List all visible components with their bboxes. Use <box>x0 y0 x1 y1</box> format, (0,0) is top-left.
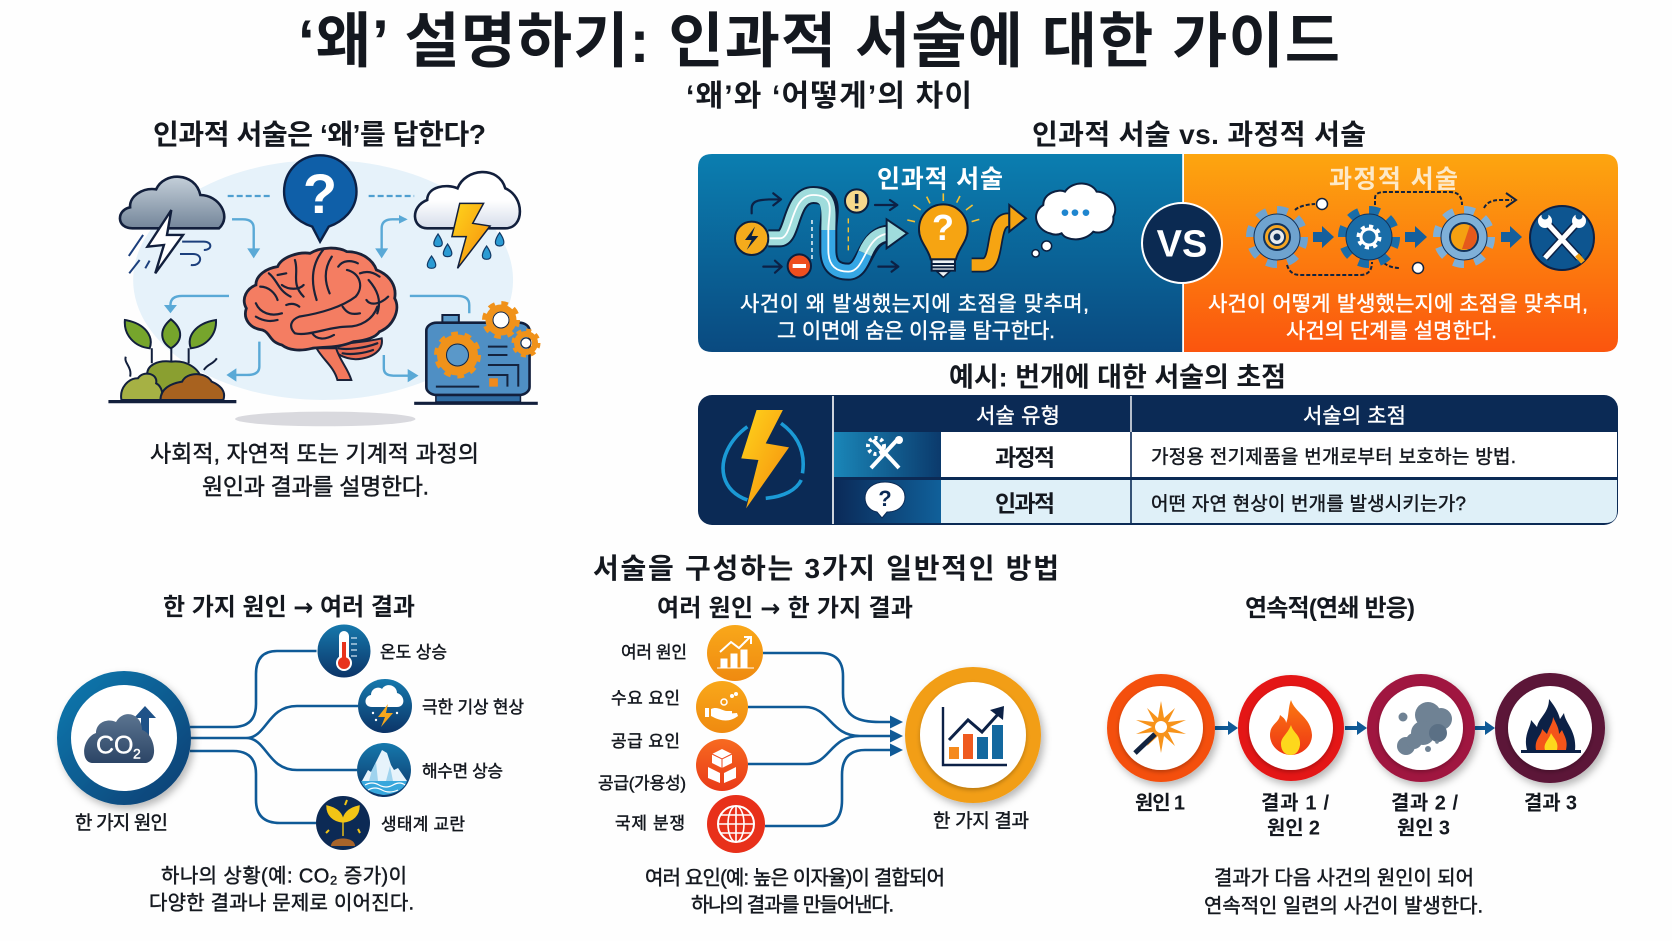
cause: supply availability <box>598 739 748 793</box>
heading: 연속적(연쇄 반응) <box>1245 595 1415 622</box>
icon: machine <box>414 315 538 403</box>
causal description <box>740 293 1089 343</box>
heading: 인과적 서술은 ‘왜’를 답한다? <box>153 119 486 150</box>
heading: lightning example: 예시: 번개에 대한 서술의 초점 <box>949 362 1286 392</box>
description: 결과가 다음 사건의 원인이 되어 <box>1214 866 1474 890</box>
step: effect 1 / cause 2 <box>1238 675 1344 840</box>
causal heading: 인과적 서술 <box>877 166 1003 194</box>
icons: process gears <box>1251 192 1594 275</box>
icon: thunder cloud <box>415 172 520 268</box>
description <box>645 866 945 916</box>
bulb question mark: ? <box>932 207 954 248</box>
arrows around brain <box>164 215 469 382</box>
process description: 사건의 단계를 설명한다. <box>1286 320 1497 343</box>
step: effect 2 / cause 3: 결과 2 / <box>1391 792 1458 814</box>
cause: demand factors <box>611 681 748 733</box>
icon: question head: ? <box>878 486 892 511</box>
effect: sea level rise: 해수면 상승 <box>422 762 503 781</box>
row: causal: 인과적 <box>995 490 1055 516</box>
panel: process narrative <box>1184 154 1618 352</box>
step: effect 1 / cause 2: 원인 2 <box>1267 816 1320 840</box>
description <box>150 440 479 500</box>
panel: causal narrative answers why <box>108 119 538 500</box>
gear 1 <box>1251 211 1303 263</box>
effect: temperature rise <box>317 624 447 678</box>
description <box>1204 866 1483 918</box>
panel: one cause many effects <box>57 594 524 914</box>
row: causal: 어떤 자연 현상이 번개를 발생시키는가? <box>1151 493 1466 515</box>
table header <box>976 405 1406 428</box>
connector lines <box>190 651 358 823</box>
step: effect 1 / cause 2: 결과 1 / <box>1261 792 1329 814</box>
description: 하나의 결과를 만들어낸다. <box>691 894 894 916</box>
panel: comparison <box>698 154 1618 352</box>
cause: demand factors: 수요 요인 <box>611 689 680 708</box>
effect: ecosystem disturbance <box>316 796 465 850</box>
step: effect 2 / cause 3: 원인 3 <box>1397 816 1450 840</box>
process description <box>1208 293 1588 343</box>
cause: international conflict <box>615 795 765 853</box>
description <box>149 864 414 914</box>
icon: fire <box>1521 699 1581 752</box>
table: lightning example <box>698 395 1618 525</box>
icon: question head <box>865 482 905 518</box>
icon: plants and soil <box>108 319 236 402</box>
description: 하나의 상황(예: CO₂ 증가)이 <box>161 864 407 888</box>
causal description: 그 이면에 숨은 이유를 탐구한다. <box>777 320 1055 343</box>
cause: multiple causes: 여러 원인 <box>621 643 687 662</box>
cause: multiple causes <box>621 625 763 681</box>
effect: extreme weather: 극한 기상 현상 <box>422 698 524 717</box>
icon: tools <box>1530 206 1594 270</box>
description: 사회적, 자연적 또는 기계적 과정의 <box>150 440 479 466</box>
effect: extreme weather <box>358 679 524 733</box>
step: effect 3: 결과 3 <box>1524 792 1577 814</box>
step: cause 1 <box>1107 674 1215 814</box>
row: process: 가정용 전기제품을 번개로부터 보호하는 방법. <box>1151 446 1516 468</box>
description: 다양한 결과나 문제로 이어진다. <box>149 892 414 914</box>
icon: CO2 cause circle <box>57 671 191 805</box>
step: effect 3 <box>1495 673 1605 814</box>
arrows between steps <box>1215 721 1495 735</box>
cause label: 한 가지 원인 <box>75 812 168 834</box>
panel: chain reaction <box>1107 595 1605 918</box>
cause: supply factors: 공급 요인 <box>611 732 680 751</box>
cause: supply availability: 공급(가용성) <box>598 774 686 793</box>
gear 2 <box>1343 211 1395 263</box>
icon: flame <box>1270 700 1312 755</box>
icon: CO2 cause circle: CO <box>96 732 134 760</box>
panel: causal narrative <box>698 154 1183 352</box>
heading: 한 가지 원인 → 여러 결과 <box>163 594 415 622</box>
step: cause 1: 원인 1 <box>1135 792 1185 814</box>
process description: 사건이 어떻게 발생했는지에 초점을 맞추며, <box>1208 293 1588 316</box>
icon: single effect circle <box>905 667 1041 803</box>
heading: 여러 원인 → 한 가지 결과 <box>657 594 913 622</box>
row: causal <box>865 482 1466 518</box>
row: process: 과정적 <box>995 444 1055 470</box>
connector lines <box>748 653 892 826</box>
title: ‘왜’ 설명하기: 인과적 서술에 대한 가이드 <box>298 8 1340 75</box>
icon: lightning with cycle <box>723 410 803 508</box>
icons: causal path <box>735 184 1115 278</box>
icon: question bubble <box>284 155 357 242</box>
cause: international conflict: 국제 분쟁 <box>615 814 685 833</box>
icon: brain <box>244 248 397 380</box>
VS badge <box>1142 154 1222 352</box>
icon: storm cloud <box>120 177 224 273</box>
icon: spark <box>1135 701 1186 753</box>
illustration: brain with surrounding processes <box>108 155 538 426</box>
arrows between gears <box>1313 226 1522 248</box>
question mark: ? <box>303 162 337 225</box>
arrowheads <box>890 716 903 756</box>
VS badge: VS <box>1157 224 1207 266</box>
gear 3 <box>1438 211 1490 263</box>
subtitle: ‘왜’와 ‘어떻게’의 차이 <box>686 80 972 113</box>
effect label: 한 가지 결과 <box>933 810 1029 832</box>
heading: causal vs process: 인과적 서술 vs. 과정적 서술 <box>1032 119 1366 150</box>
section heading: 서술을 구성하는 3가지 일반적인 방법 <box>593 553 1059 584</box>
icon: CO2 cause circle: 2 <box>133 746 141 762</box>
step: effect 2 / cause 3 <box>1367 674 1475 840</box>
causal description: 사건이 왜 발생했는지에 초점을 맞추며, <box>740 293 1089 316</box>
effect: ecosystem disturbance: 생태계 교란 <box>381 815 465 834</box>
icon: smoke <box>1397 702 1452 755</box>
effect: temperature rise: 온도 상승 <box>380 643 447 662</box>
effect: sea level rise <box>357 743 503 797</box>
description: 원인과 결과를 설명한다. <box>202 474 429 500</box>
icon: tools <box>868 436 903 468</box>
description: 연속적인 일련의 사건이 발생한다. <box>1204 894 1483 918</box>
process heading: 과정적 서술 <box>1329 166 1458 194</box>
description: 여러 요인(예: 높은 이자율)이 결합되어 <box>645 866 945 890</box>
table header: 서술의 초점 <box>1303 405 1406 428</box>
table header: 서술 유형 <box>976 405 1060 428</box>
machine gears <box>438 304 538 375</box>
row: process <box>868 436 1516 470</box>
panel: many causes one effect <box>598 594 1041 916</box>
